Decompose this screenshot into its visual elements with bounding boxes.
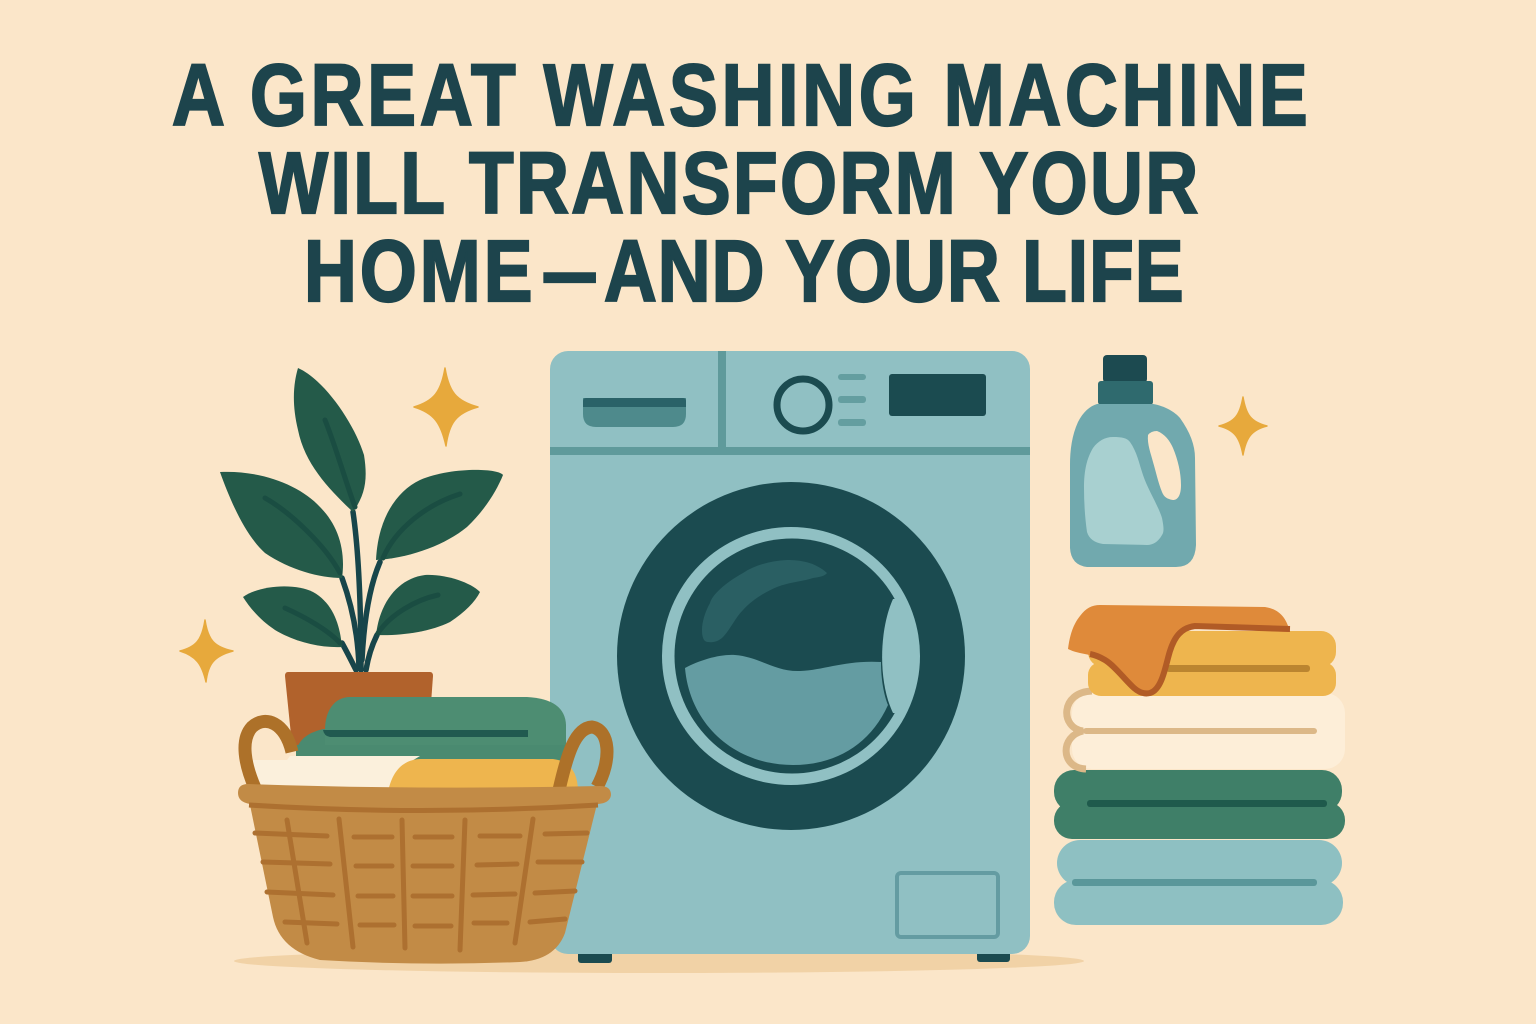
indicator lights <box>838 374 866 426</box>
glass reflection <box>882 599 913 713</box>
water <box>685 655 888 765</box>
basket weave <box>255 819 587 950</box>
title: WILL TRANSFORM YOUR <box>259 135 1198 232</box>
title <box>172 47 1308 320</box>
laundry basket <box>238 697 611 964</box>
title: HOME <box>304 223 532 320</box>
machine feet <box>578 948 1010 963</box>
yellow towels <box>1088 631 1336 696</box>
title: AND YOUR LIFE <box>604 223 1184 320</box>
basket body <box>249 800 598 964</box>
door <box>617 482 965 830</box>
glass highlight <box>702 560 827 642</box>
light blue towels <box>1054 840 1343 925</box>
green towels <box>1054 770 1345 839</box>
bottle label <box>1084 437 1164 545</box>
machine body <box>550 351 1030 954</box>
plant <box>220 368 503 745</box>
detergent bottle <box>1070 355 1196 567</box>
stems <box>342 512 380 670</box>
basket rim <box>238 784 611 808</box>
washing machine <box>550 351 1030 963</box>
floor shadow <box>234 949 1084 973</box>
sparkle right <box>1219 397 1267 455</box>
control dial <box>777 379 829 431</box>
sparkle top <box>414 368 478 446</box>
control panel dividers <box>550 351 1030 455</box>
sparkle left <box>180 620 233 682</box>
cream towels <box>1066 691 1345 769</box>
bottle handle hole <box>1148 431 1181 500</box>
basket handles <box>245 721 607 790</box>
leaf veins <box>265 420 460 643</box>
orange cloth <box>1068 605 1290 694</box>
title: A GREAT WASHING MACHINE <box>172 47 1308 144</box>
folded towel stack <box>1054 605 1345 925</box>
title: — <box>544 223 596 320</box>
plant pot <box>285 672 433 745</box>
sparkles <box>180 368 1267 682</box>
service panel <box>897 873 998 937</box>
display <box>889 374 986 416</box>
detergent drawer <box>583 398 686 427</box>
leaves <box>220 368 503 647</box>
laundry in basket <box>253 697 578 792</box>
